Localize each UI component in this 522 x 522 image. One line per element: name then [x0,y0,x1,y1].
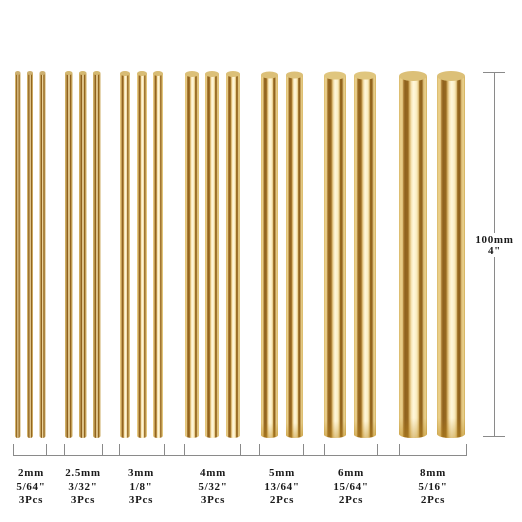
label: 4mm: 3Pcs [201,494,225,506]
label: 3mm [128,467,154,506]
height label: 100mm [475,234,514,246]
label: 6mm: 15/64" [333,481,369,493]
rods: 4mm [185,71,240,438]
label: 5mm: 13/64" [264,481,300,493]
label: 3mm: 3Pcs [129,494,153,506]
label: 2.5mm: 2.5mm [65,467,101,479]
label: 2mm: 5/64" [16,481,46,493]
rods: 6mm [324,72,376,438]
label: 6mm [333,467,369,506]
rods: 2.5mm [65,71,100,438]
label: 6mm: 2Pcs [339,494,363,506]
rods: 8mm [399,71,465,438]
label: 8mm: 8mm [420,467,446,479]
label: 4mm: 5/32" [198,481,228,493]
label: 2.5mm: 3/32" [68,481,98,493]
label: 3mm: 3mm [128,467,154,479]
label: 8mm: 2Pcs [421,494,445,506]
label: 2.5mm: 3Pcs [71,494,95,506]
height label: 4" [488,245,501,257]
bottom width brackets [14,444,466,456]
rods: 3mm [120,71,163,438]
label: 8mm [418,467,448,506]
label: 4mm [198,467,228,506]
rods: 5mm [261,72,303,438]
label: 5mm: 5mm [269,467,295,479]
label: 2mm [16,467,46,506]
label: 6mm: 6mm [338,467,364,479]
label: 4mm: 4mm [200,467,226,479]
height dimension line [483,72,505,436]
label: 5mm: 2Pcs [270,494,294,506]
label: 2mm: 3Pcs [19,494,43,506]
height label [475,234,514,257]
label: 5mm [264,467,300,506]
label: 8mm: 5/16" [418,481,448,493]
label: 3mm: 1/8" [130,481,152,493]
label: 2mm: 2mm [18,467,44,479]
label: 2.5mm [65,467,101,506]
rods: 2mm [15,71,46,438]
